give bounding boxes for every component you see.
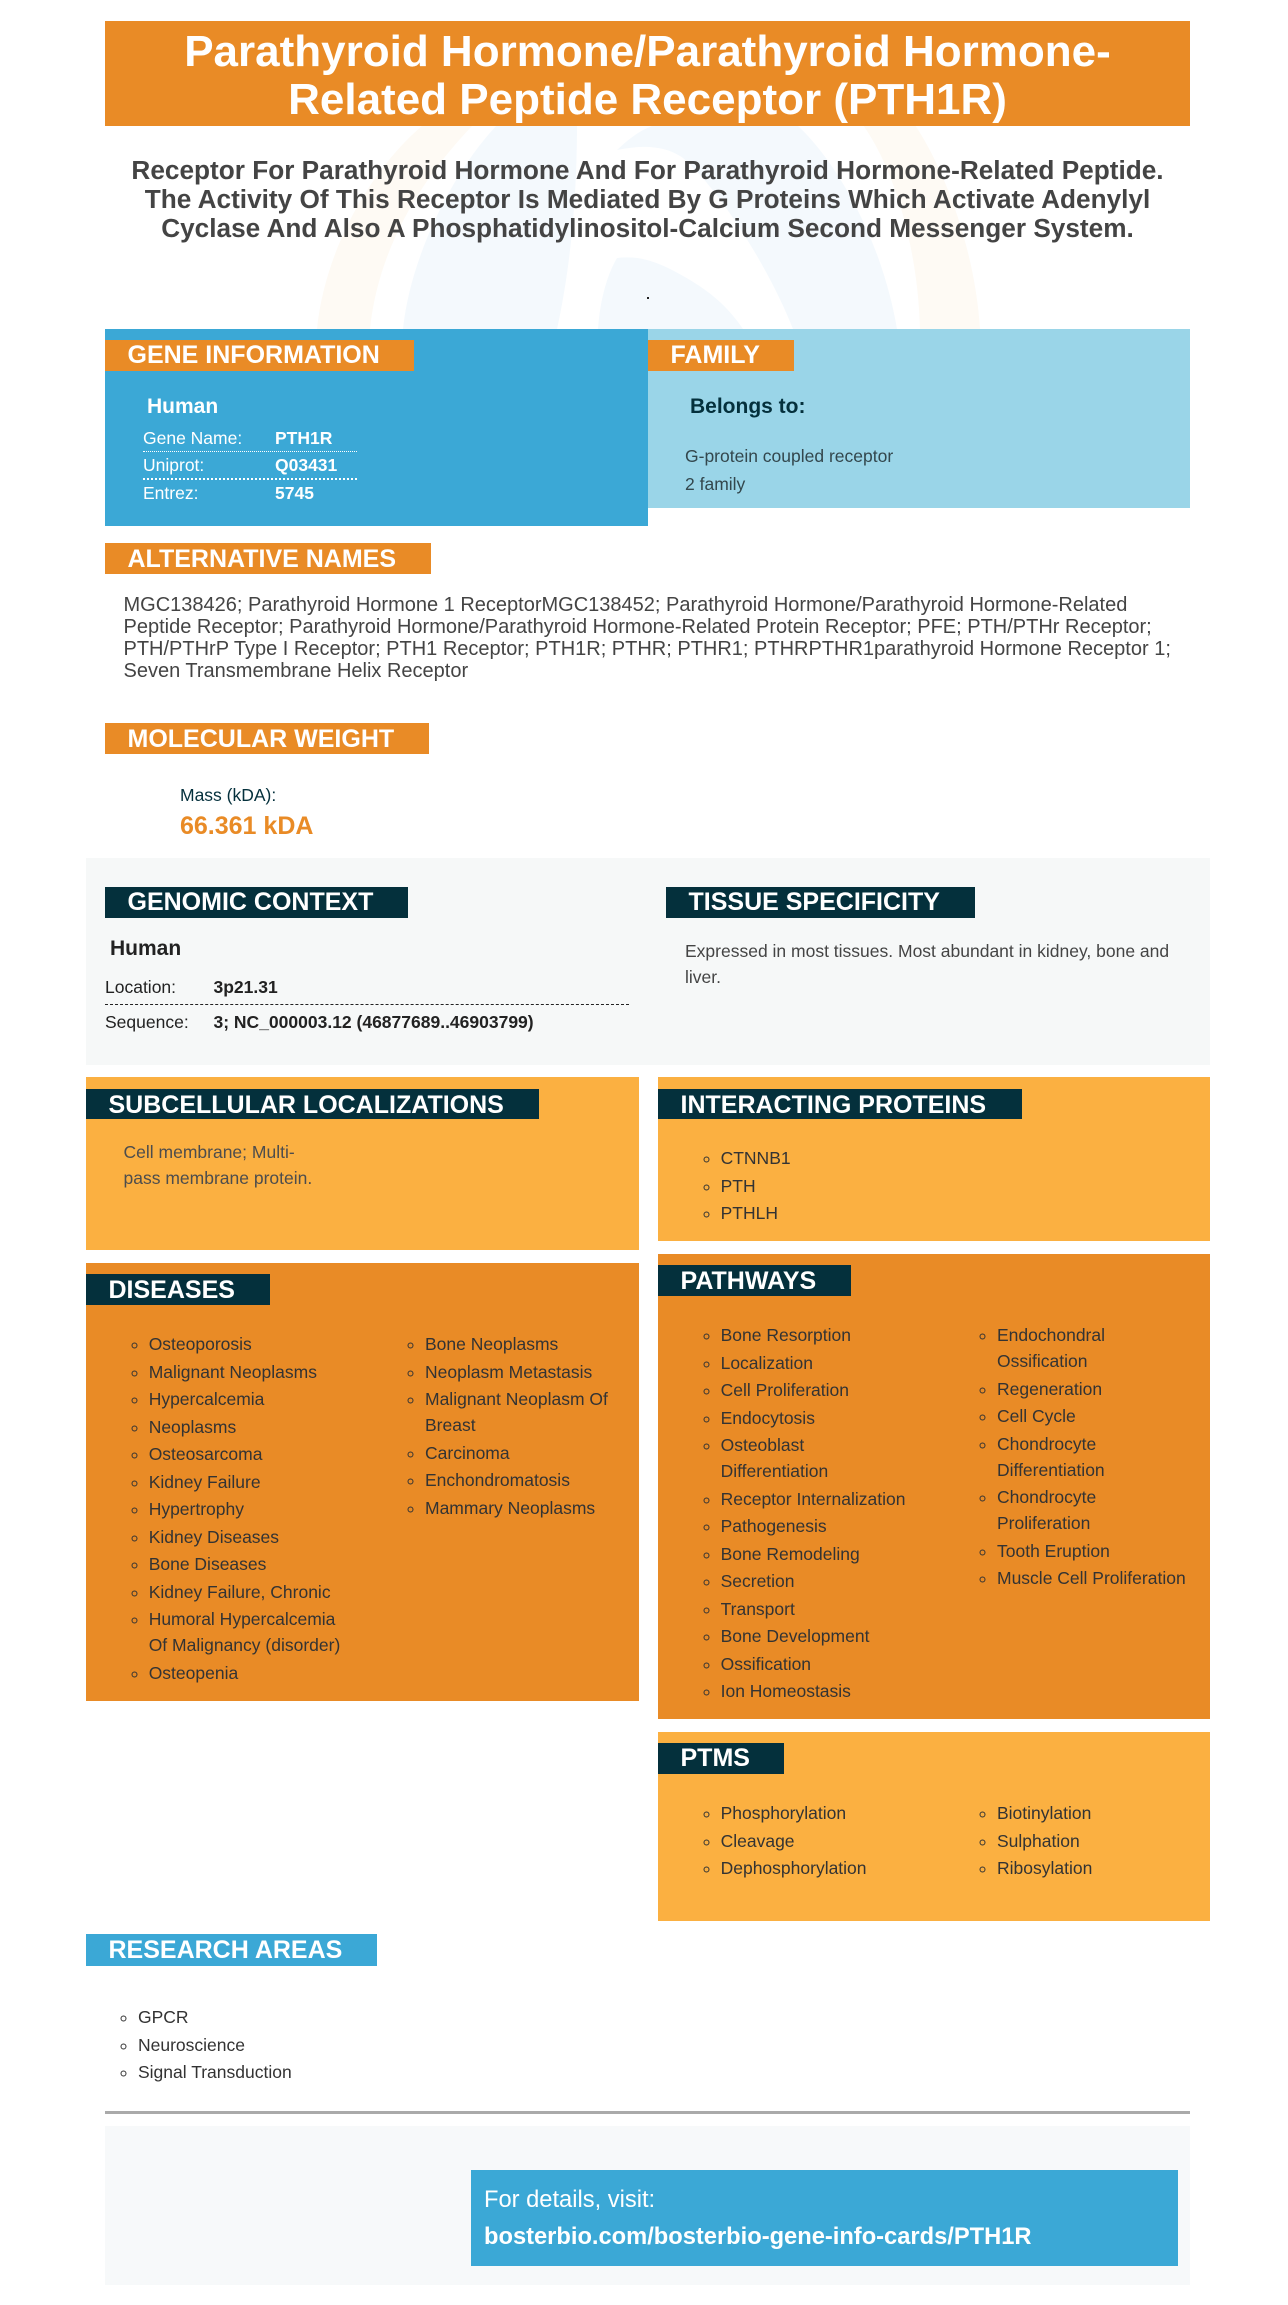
heading: genomic context: GENOMIC CONTEXT [128,888,373,916]
pathways list column 2: Muscle Cell Proliferation [997,1568,1186,1588]
pathways list column 1: Localization [721,1352,813,1372]
subtitle description [131,155,1164,243]
gene name row: Gene Name: [143,428,242,448]
alternative names text: Peptide Receptor; Parathyroid Hormone/Parathyroid Hormone-Related Protein Receptor; PFE; PTH/PTHr Receptor; [124,616,1152,638]
interacting proteins list: PTH [721,1176,756,1196]
PTMs list column 2: Sulphation [997,1830,1080,1850]
pathways list column 2: Cell Cycle [997,1406,1076,1426]
subtitle description: Cyclase And Also A Phosphatidylinositol-Calcium Second Messenger System. [161,213,1134,243]
heading: research areas: RESEARCH AREAS [108,1936,342,1964]
pathways list column 2: Differentiation [997,1460,1105,1480]
research areas list: Signal Transduction [138,2062,292,2082]
subcellular text: pass membrane protein. [124,1168,312,1188]
pathways list column 1: Secretion [721,1571,795,1591]
pathways list column 2: Proliferation [997,1513,1090,1533]
tissue specificity text: liver. [685,967,721,987]
subtitle description: The Activity Of This Receptor Is Mediated By G Proteins Which Activate Adenylyl [145,184,1150,214]
mass value: 66.361 kDA [180,812,313,840]
diseases list column 2 [408,1334,608,1518]
diseases list column 1: Humoral Hypercalcemia [149,1609,335,1629]
research areas list [120,2007,292,2082]
alternative names text: PTH/PTHrP Type I Receptor; PTH1 Receptor; PTH1R; PTHR; PTHR1; PTHRPTHR1parathyroid Hormone Receptor 1; [124,638,1171,660]
PTMs list column 1: Phosphorylation [721,1803,846,1823]
footer panel [105,2111,1190,2266]
location row: 3p21.31 [214,977,278,997]
entrez row: Entrez: [143,483,198,503]
heading: pathways [658,1265,851,1296]
uniprot row: Uniprot: [143,455,204,475]
pathways list column 2: Chondrocyte [997,1434,1096,1454]
heading: molecular weight: MOLECULAR WEIGHT [128,725,394,753]
mass label: Mass (kDA): [180,785,276,805]
heading: gene information: GENE INFORMATION [128,341,380,369]
diseases list column 1: Kidney Failure, Chronic [149,1582,331,1602]
location row [105,974,629,1005]
diseases list column 1 [132,1334,340,1682]
pathways list column 2: Endochondral [997,1325,1105,1345]
diseases list column 2: Bone Neoplasms [425,1334,558,1354]
pathways list column 2: Chondrocyte [997,1487,1096,1507]
pathways list column 1: Osteoblast [721,1435,804,1455]
location row: Location: [105,977,176,997]
heading: diseases [86,1274,270,1305]
heading: diseases: DISEASES [108,1276,235,1304]
footer background [105,2126,1190,2285]
diseases list column 1: Malignant Neoplasms [149,1362,317,1382]
panel: family [648,329,1190,508]
small dot [647,297,649,299]
footer rule [105,2111,1190,2114]
diseases list column 2: Neoplasm Metastasis [425,1362,592,1382]
family text [685,446,893,494]
diseases list column 1: Osteopenia [149,1662,238,1682]
diseases list column 1: Kidney Diseases [149,1526,279,1546]
pathways list column 1: Transport [721,1598,795,1618]
diseases list column 2: Breast [425,1415,476,1435]
heading: PTMs: PTMS [680,1744,750,1772]
PTMs list column 1: Dephosphorylation [721,1858,867,1878]
pathways list column 1 [704,1325,905,1701]
heading: tissue specificity: TISSUE SPECIFICITY [688,888,940,916]
family text: G-protein coupled receptor [685,446,893,466]
heading: PTMs [658,1743,784,1774]
pathways list column 1: Receptor Internalization [721,1488,905,1508]
diseases list column 2: Enchondromatosis [425,1470,570,1490]
PTMs list column 2: Biotinylation [997,1803,1091,1823]
pathways list column 1: Ossification [721,1654,811,1674]
heading: family [648,340,794,371]
heading: family: FAMILY [670,341,760,369]
alternative names text [124,594,1171,682]
uniprot row [143,452,357,480]
panel: subcellular localizations [86,1077,638,1250]
callout: details link [471,2170,1178,2266]
research areas list: GPCR [138,2007,189,2027]
heading: pathways: PATHWAYS [680,1267,816,1295]
heading: interacting proteins: INTERACTING PROTEINS [680,1091,986,1119]
pathways list column 2: Ossification [997,1351,1087,1371]
diseases list column 1: Bone Diseases [149,1554,266,1574]
panel: gene information [105,329,648,526]
pathways list column 1: Bone Development [721,1626,869,1646]
panel: genomic context and tissue specificity: 3; NC_000003.12 (46877689..46903799) [214,1012,534,1032]
pathways list column 2 [980,1325,1186,1588]
tissue specificity text: Expressed in most tissues. Most abundant in kidney, bone and [685,941,1169,961]
diseases list column 2: Malignant Neoplasm Of [425,1389,608,1409]
entrez row: 5745 [275,483,314,503]
panel: interacting proteins [658,1077,1210,1241]
gene name row: PTH1R [275,428,332,448]
pathways list column 1: Bone Resorption [721,1325,851,1345]
background watermark [317,126,980,329]
subcellular text: Cell membrane; Multi- [124,1142,295,1162]
species label: Human [147,395,218,418]
title [105,21,1190,126]
panel: pathways [658,1254,1210,1718]
panel: PTMs [658,1732,1210,1921]
diseases list column 1: Kidney Failure [149,1472,261,1492]
diseases list column 1: Hypercalcemia [149,1389,264,1409]
family text: 2 family [685,474,745,494]
diseases list column 2: Mammary Neoplasms [425,1498,595,1518]
pathways list column 2: Regeneration [997,1378,1102,1398]
entrez row [143,483,314,503]
pathways list column 1: Pathogenesis [721,1516,827,1536]
diseases list column 2: Carcinoma [425,1442,510,1462]
callout: details link: bosterbio.com/bosterbio-gene-info-cards/PTH1R [484,2224,1032,2250]
subcellular text [124,1142,312,1188]
interacting proteins list: PTHLH [721,1203,778,1223]
heading: subcellular localizations: SUBCELLULAR LOCALIZATIONS [108,1091,504,1119]
pathways list column 1: Ion Homeostasis [721,1681,851,1701]
research areas list: Neuroscience [138,2034,245,2054]
PTMs list column 1 [704,1803,867,1878]
pathways list column 1: Bone Remodeling [721,1544,860,1564]
sequence row [105,1012,534,1032]
PTMs list column 1: Cleavage [721,1830,795,1850]
tissue specificity text [685,941,1169,987]
species label: Human [110,937,181,960]
callout: details link: For details, visit: [484,2187,655,2213]
diseases list column 1: Of Malignancy (disorder) [149,1635,340,1655]
belongs to label: Belongs to: [690,395,806,418]
alternative names text: Seven Transmembrane Helix Receptor [124,660,468,682]
subtitle description: Receptor For Parathyroid Hormone And For Parathyroid Hormone-Related Peptide. [131,155,1164,185]
sequence row: Sequence: [105,1012,189,1032]
pathways list column 2: Tooth Eruption [997,1540,1110,1560]
title: Parathyroid Hormone/Parathyroid Hormone- [184,27,1111,76]
interacting proteins list [704,1148,791,1223]
title: Related Peptide Receptor (PTH1R) [288,75,1007,124]
heading: alternative names: ALTERNATIVE NAMES [128,545,396,573]
PTMs list column 2 [980,1803,1092,1878]
diseases list column 1: Osteosarcoma [149,1444,262,1464]
PTMs list column 2: Ribosylation [997,1858,1092,1878]
diseases list column 1: Neoplasms [149,1416,236,1436]
gene name row [143,425,357,452]
diseases list column 1: Hypertrophy [149,1499,244,1519]
pathways list column 1: Differentiation [721,1461,828,1481]
diseases list column 1: Osteoporosis [149,1334,252,1354]
interacting proteins list: CTNNB1 [721,1148,791,1168]
pathways list column 1: Cell Proliferation [721,1380,849,1400]
alternative names text: MGC138426; Parathyroid Hormone 1 ReceptorMGC138452; Parathyroid Hormone/Parathyroid Hormone-Related [124,594,1127,616]
pathways list column 1: Endocytosis [721,1408,815,1428]
panel: genomic context and tissue specificity [86,858,1210,1065]
panel: diseases [86,1263,638,1701]
uniprot row: Q03431 [275,455,337,475]
